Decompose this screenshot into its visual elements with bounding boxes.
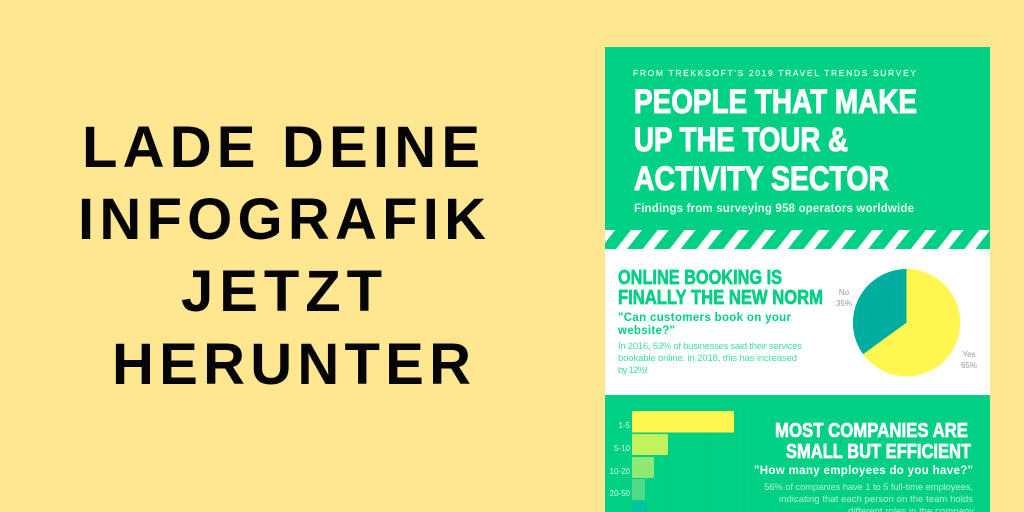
booking question: website?" xyxy=(617,325,675,337)
online booking heading: ONLINE BOOKING IS xyxy=(618,267,782,289)
bar labels: 5-10 xyxy=(614,444,631,453)
panel: company size xyxy=(605,395,990,512)
panel: infographic header xyxy=(605,47,990,250)
booking description xyxy=(618,341,802,376)
subtitle: Findings from surveying 958 operators worldwide xyxy=(634,203,914,215)
panel: online booking xyxy=(605,249,990,395)
infographic title: UP THE TOUR & xyxy=(634,121,848,159)
bar chart xyxy=(610,411,744,512)
booking question xyxy=(617,312,792,337)
online booking heading xyxy=(618,267,823,309)
employees description: indicating that each person on the team holds xyxy=(779,494,973,505)
pie chart xyxy=(836,269,977,376)
bar labels: 1-5 xyxy=(618,421,631,430)
infographic title xyxy=(634,83,917,198)
heading: download call to action: LADE DEINE xyxy=(82,115,480,180)
company size heading xyxy=(775,420,971,463)
survey source line: FROM TREKKSOFT'S 2019 TRAVEL TRENDS SURVEY xyxy=(633,68,916,78)
pie label: no: 35% xyxy=(836,299,852,308)
pie label: yes xyxy=(961,350,977,370)
online booking heading: FINALLY THE NEW NORM xyxy=(618,287,823,309)
pie label: no xyxy=(836,288,852,308)
bar labels: 20-50 xyxy=(610,489,631,498)
booking description: by 12%! xyxy=(618,365,648,376)
bar labels: 10-20 xyxy=(610,467,631,476)
employees question: "How many employees do you have?" xyxy=(754,465,973,477)
pie label: yes: Yes xyxy=(962,350,976,359)
heading: download call to action: HERUNTER xyxy=(112,332,471,397)
company size heading: SMALL BUT EFFICIENT xyxy=(786,441,971,463)
booking description: In 2016, 53% of businesses said their services xyxy=(618,341,802,352)
company size heading: MOST COMPANIES ARE xyxy=(775,420,968,442)
pie label: no: No xyxy=(839,288,850,297)
infographic title: PEOPLE THAT MAKE xyxy=(634,83,917,121)
hazard stripes xyxy=(605,230,990,249)
employees description xyxy=(764,482,974,512)
infographic title: ACTIVITY SECTOR xyxy=(634,160,889,198)
bar labels xyxy=(610,421,631,498)
pie label: yes: 65% xyxy=(961,361,977,370)
booking question: "Can customers book on your xyxy=(618,312,792,324)
booking description: bookable online. in 2018, this has increased xyxy=(618,353,797,364)
heading: download call to action: JETZT xyxy=(181,259,382,324)
employees description: 56% of companies have 1 to 5 full-time employees, xyxy=(764,482,973,493)
heading: download call to action: INFOGRAFIK xyxy=(78,187,486,252)
heading: download call to action xyxy=(78,115,486,397)
